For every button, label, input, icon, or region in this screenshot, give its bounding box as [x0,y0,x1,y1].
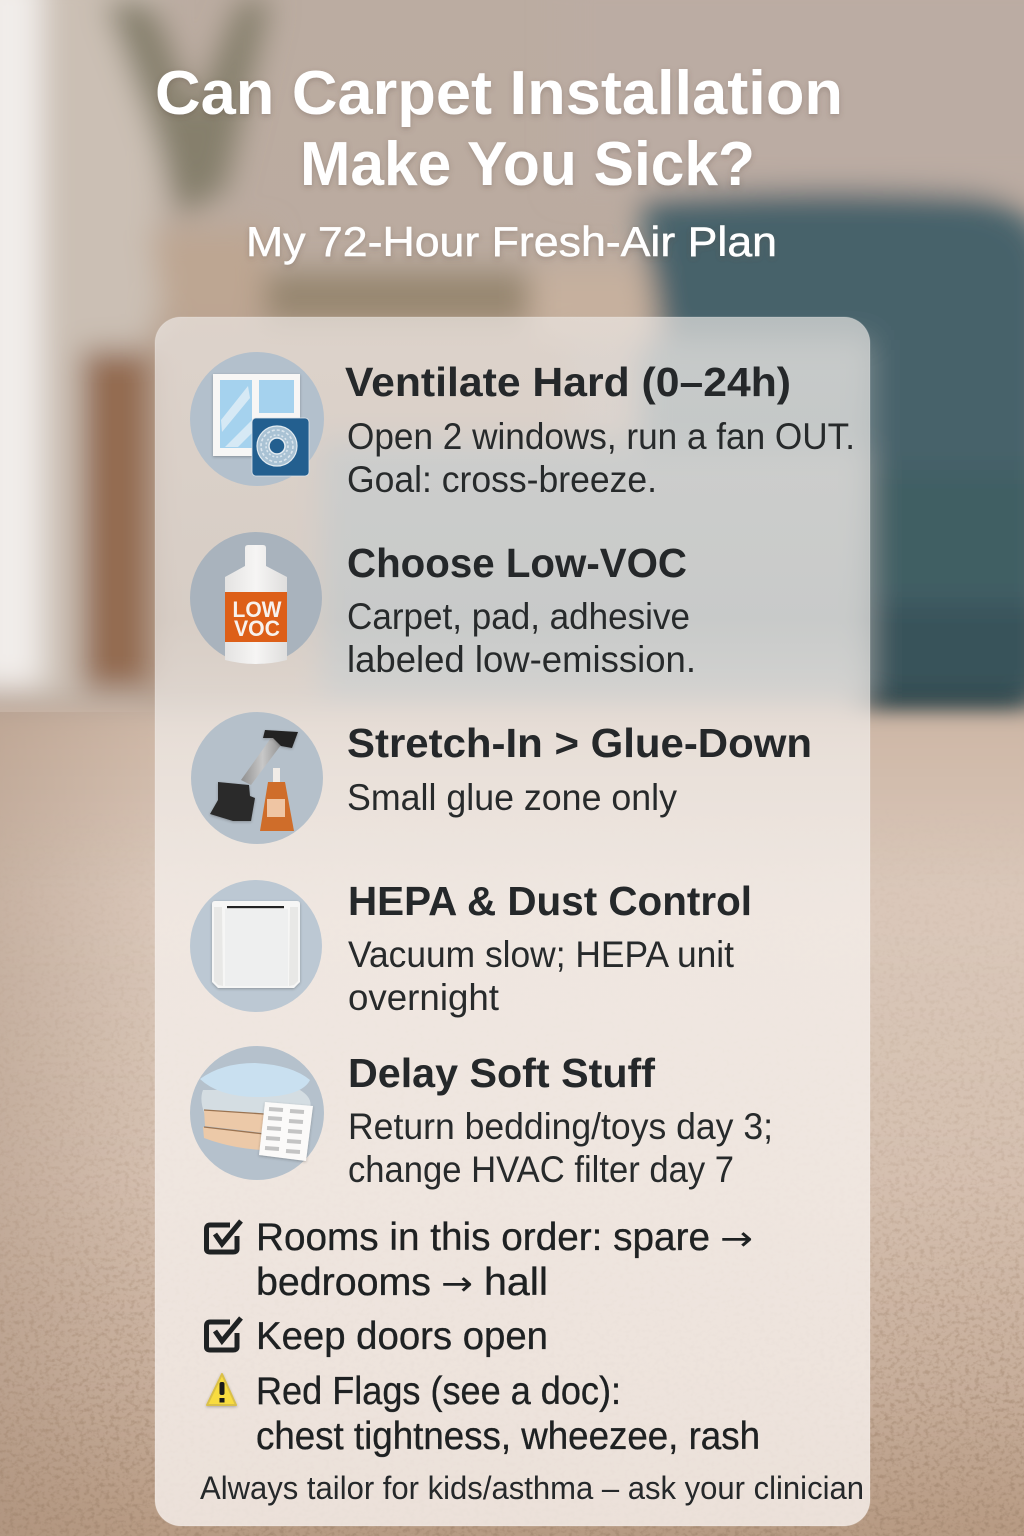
title: Make You Sick? [300,130,755,199]
checklist text: hall [484,1261,548,1304]
warning text [256,1370,760,1458]
step 1: ventilate hard [190,352,855,500]
description: Open 2 windows, run a fan OUT. [347,416,855,457]
description: labeled low-emission. [347,639,696,680]
heading: Delay Soft Stuff [348,1050,655,1096]
step 4: hepa and dust control [190,878,752,1018]
heading: HEPA & Dust Control [348,878,752,924]
icon: window and fan [190,352,324,486]
warning text: Red Flags (see a doc): [256,1370,621,1413]
description: Goal: cross-breeze. [347,459,657,500]
title [155,59,843,199]
subtitle: My 72-Hour Fresh-Air Plan [246,218,777,265]
icon: checkbox [206,1221,241,1252]
checklist text: → [441,1264,473,1304]
description: change HVAC filter day 7 [348,1149,734,1190]
panel: fresh-air plan card [155,317,870,1526]
heading: Choose Low-VOC [347,540,687,586]
step 3: stretch-in over glue-down [191,712,812,844]
description: Return bedding/toys day 3; [348,1106,773,1147]
icon: bedding and document [190,1046,324,1180]
checklist item: room order [206,1216,753,1304]
description: Carpet, pad, adhesive [347,596,690,637]
checklist text: bedrooms [256,1261,431,1304]
checklist text: Rooms in this order: spare [256,1216,710,1259]
icon: warning triangle [207,1374,236,1405]
description [347,416,855,500]
heading: Stretch-In > Glue-Down [347,720,812,766]
checklist text [256,1216,753,1304]
description: overnight [348,977,500,1018]
warning text: chest tightness, wheezee, rash [256,1415,760,1458]
icon: stretcher and glue [191,712,323,844]
heading: Ventilate Hard (0–24h) [345,359,791,405]
description: Small glue zone only [347,777,677,818]
description [348,1106,773,1190]
icon: hepa air purifier [190,880,322,1012]
checklist text: → [720,1219,753,1259]
description [347,596,696,680]
description [348,934,735,1018]
icon: low-voc bottle [190,532,322,664]
icon: low-voc bottle: VOC [234,616,280,641]
icon: low-voc bottle: LOW [232,597,282,622]
checklist text: Keep doors open [256,1315,548,1358]
footer note: Always tailor for kids/asthma – ask your clinician [200,1470,864,1506]
icon: checkbox [206,1318,241,1350]
red flags warning [207,1370,760,1458]
title: Can Carpet Installation [155,59,843,128]
checklist item: keep doors open [206,1315,548,1358]
step 2: choose low-voc [190,532,696,680]
step 5: delay soft stuff [190,1046,773,1190]
description: Vacuum slow; HEPA unit [348,934,735,975]
